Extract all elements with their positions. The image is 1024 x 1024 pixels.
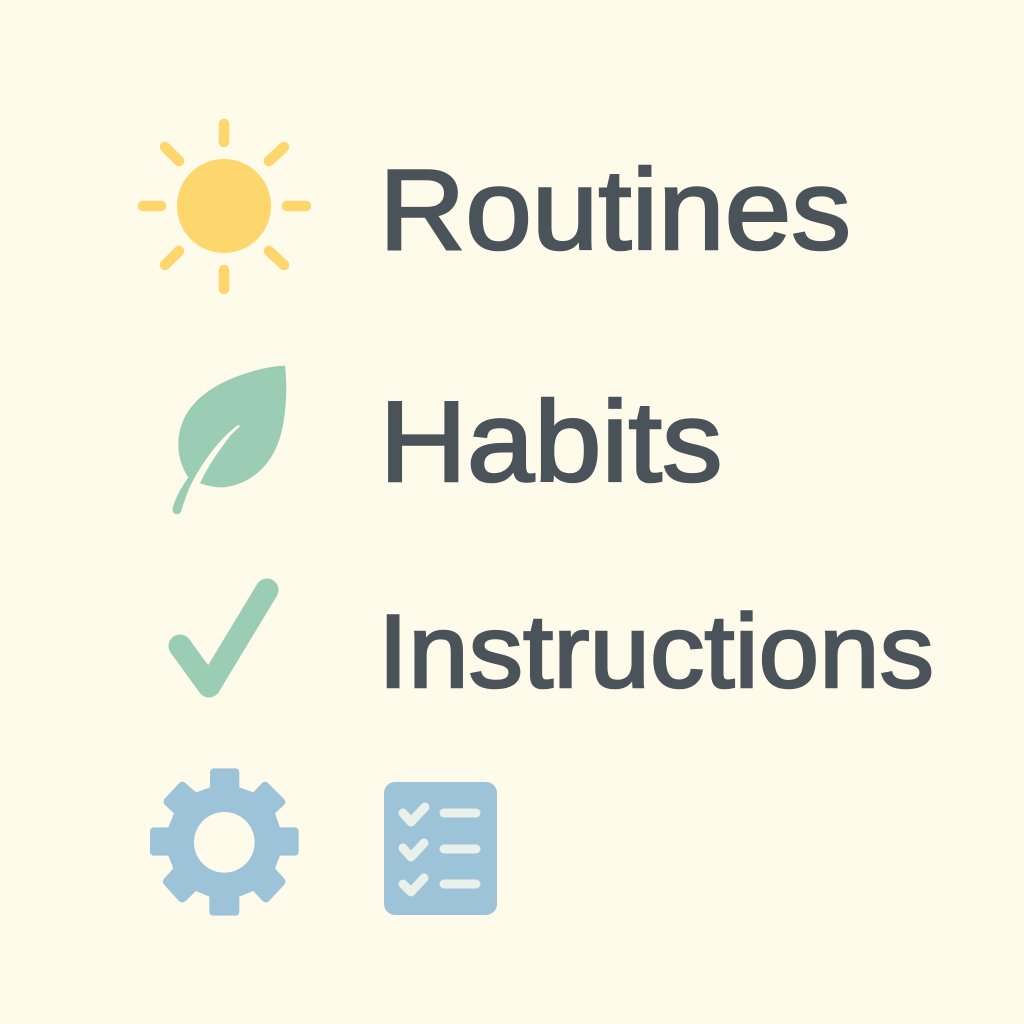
- icon: sun: [143, 124, 306, 289]
- icon: gear: [150, 768, 299, 916]
- heading: Habits: Habits: [380, 379, 722, 506]
- heading: Instructions: Instructions: [378, 594, 934, 710]
- icon: checklist document: [384, 782, 497, 915]
- icon: check mark: [180, 590, 267, 686]
- icon: leaf: [173, 366, 286, 514]
- heading: Routines: Routines: [379, 147, 851, 274]
